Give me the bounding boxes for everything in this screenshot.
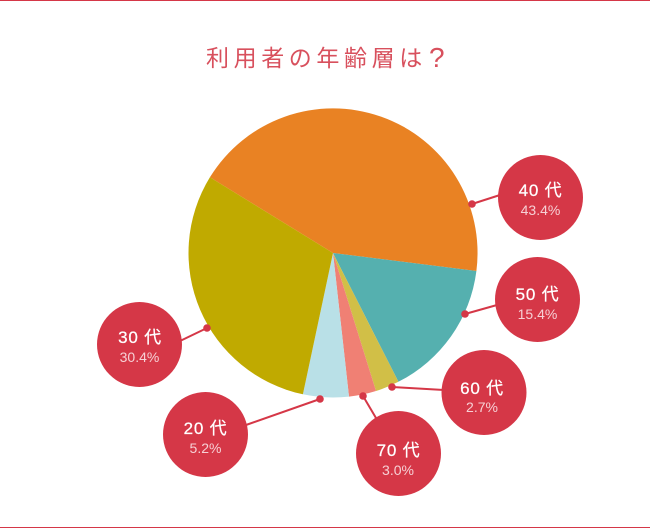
pie chart — [189, 108, 478, 397]
bottom rule — [0, 527, 650, 528]
callout: 70s — [356, 392, 441, 496]
slice: 70s — [333, 253, 376, 397]
callout: 60s: 2.7% — [466, 399, 498, 415]
callout: 30s: 30 代 — [118, 328, 162, 347]
callout: 20s: 20 代 — [184, 419, 227, 438]
title: ? — [429, 42, 445, 73]
top rule — [0, 0, 650, 1]
slice: 30s — [189, 177, 333, 394]
callout: 50s: 50 代 — [516, 285, 559, 304]
callout: 40s: 40 代 — [519, 181, 562, 200]
title: 利用者の年齢層は — [206, 45, 427, 71]
callout: 70s: 3.0% — [382, 462, 414, 478]
callout: 20s — [163, 392, 324, 477]
callout: 50s — [461, 257, 580, 342]
callout: 40s: 43.4% — [521, 202, 560, 218]
callout: 30s — [97, 302, 211, 387]
callout: 40s — [468, 155, 583, 240]
slice: 20s — [303, 253, 349, 397]
slice: 40s — [210, 108, 478, 271]
callout: 60s: 60 代 — [460, 379, 504, 398]
callout: 60s — [388, 350, 526, 435]
callout: 30s: 30.4% — [120, 349, 159, 365]
callout: 70s: 70 代 — [377, 441, 420, 460]
callout: 50s: 15.4% — [518, 306, 557, 322]
slice: 60s — [333, 253, 398, 391]
slice: 50s — [333, 253, 476, 382]
callout: 20s: 5.2% — [190, 440, 221, 456]
